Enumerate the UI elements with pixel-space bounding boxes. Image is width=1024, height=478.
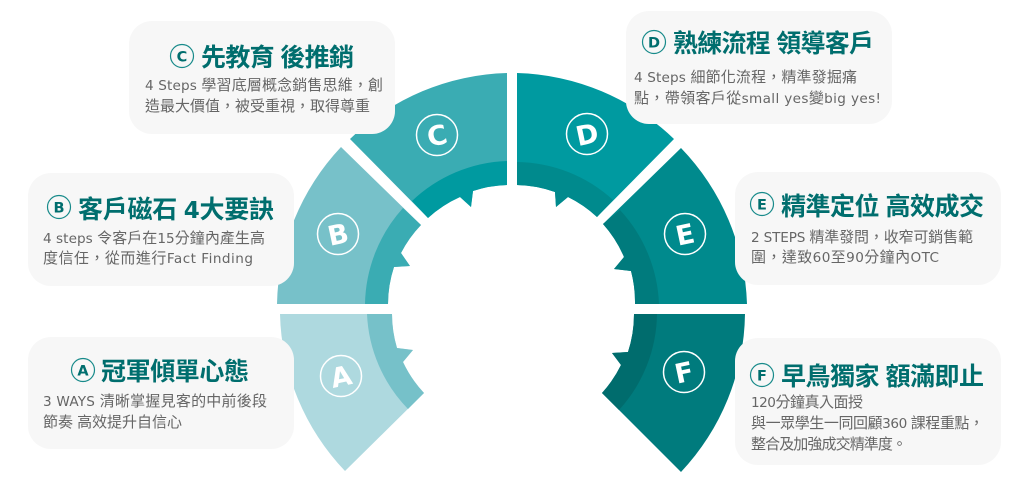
text A — [43, 393, 267, 431]
heading D: 熟練流程 領導客戶 — [673, 29, 874, 58]
badge B — [48, 196, 70, 218]
text F: 整合及加強成交精準度。 — [751, 435, 907, 453]
badge E — [750, 192, 774, 216]
segment E — [603, 148, 747, 304]
segment letter A — [320, 356, 362, 396]
text E — [751, 228, 973, 266]
heading E: 精準定位 高效成交 — [781, 192, 984, 221]
text E: 圍，達致60至90分鐘內OTC — [751, 249, 939, 266]
text E: 2 STEPS 精準發問，收窄可銷售範 — [751, 228, 973, 246]
badge D — [642, 30, 666, 54]
card D — [626, 11, 892, 124]
text F — [751, 393, 984, 453]
text F: 與一眾學生一同回顧360 課程重點， — [751, 414, 984, 432]
card A — [28, 337, 294, 449]
text F: 120分鐘真入面授 — [751, 393, 863, 411]
segment F — [602, 314, 745, 472]
badge D: D — [648, 36, 660, 52]
text D: 4 Steps 細節化流程，精準發掘痛 — [634, 68, 857, 86]
heading C: 先教育 後推銷 — [201, 43, 354, 72]
text B — [43, 230, 265, 267]
segment letter C — [416, 114, 458, 156]
text B: 度信任，從而進行Fact Finding — [43, 250, 253, 267]
badge A — [72, 358, 94, 382]
text C: 造最大價值，被受重視，取得尊重 — [145, 98, 370, 115]
badge B: B — [53, 200, 65, 216]
text C: 4 Steps 學習底層概念銷售思維，創 — [145, 76, 383, 94]
text C — [145, 76, 383, 115]
segment letter E: E — [673, 218, 698, 253]
text A: 3 WAYS 清晰掌握見客的中前後段 — [43, 393, 267, 410]
badge A: A — [77, 364, 89, 380]
badge F — [750, 364, 774, 386]
segment letter F — [664, 352, 704, 392]
text A: 節奏 高效提升自信心 — [43, 413, 182, 431]
text B: 4 steps 令客戶在15分鐘內產生高 — [43, 230, 265, 247]
segment letter E — [664, 214, 706, 254]
card B — [28, 173, 294, 286]
badge E: E — [757, 198, 767, 214]
heading A: 冠軍傾單心態 — [101, 358, 249, 386]
segment B — [277, 147, 421, 304]
segment letter D — [566, 114, 608, 154]
segment letter A: A — [328, 360, 355, 395]
segment letter F: F — [672, 356, 697, 391]
badge F: F — [757, 368, 767, 384]
card F — [735, 338, 1001, 465]
segment letter C: C — [424, 119, 450, 154]
segment letter D: D — [573, 118, 602, 153]
text D: 點，帶領客戶從small yes變big yes! — [634, 90, 881, 107]
segment letter B — [318, 214, 358, 254]
segment C — [350, 73, 507, 218]
heading F: 早鳥獨家 額滿即止 — [781, 363, 984, 391]
text D — [634, 68, 881, 107]
heading B: 客戶磁石 4大要訣 — [78, 195, 274, 224]
card E — [735, 172, 1001, 285]
segment letter B: B — [325, 218, 352, 253]
segment A — [280, 314, 424, 471]
card C — [129, 21, 395, 134]
badge C — [170, 44, 194, 68]
segment D — [517, 73, 674, 217]
ring chart — [277, 73, 747, 472]
badge C: C — [177, 50, 187, 66]
